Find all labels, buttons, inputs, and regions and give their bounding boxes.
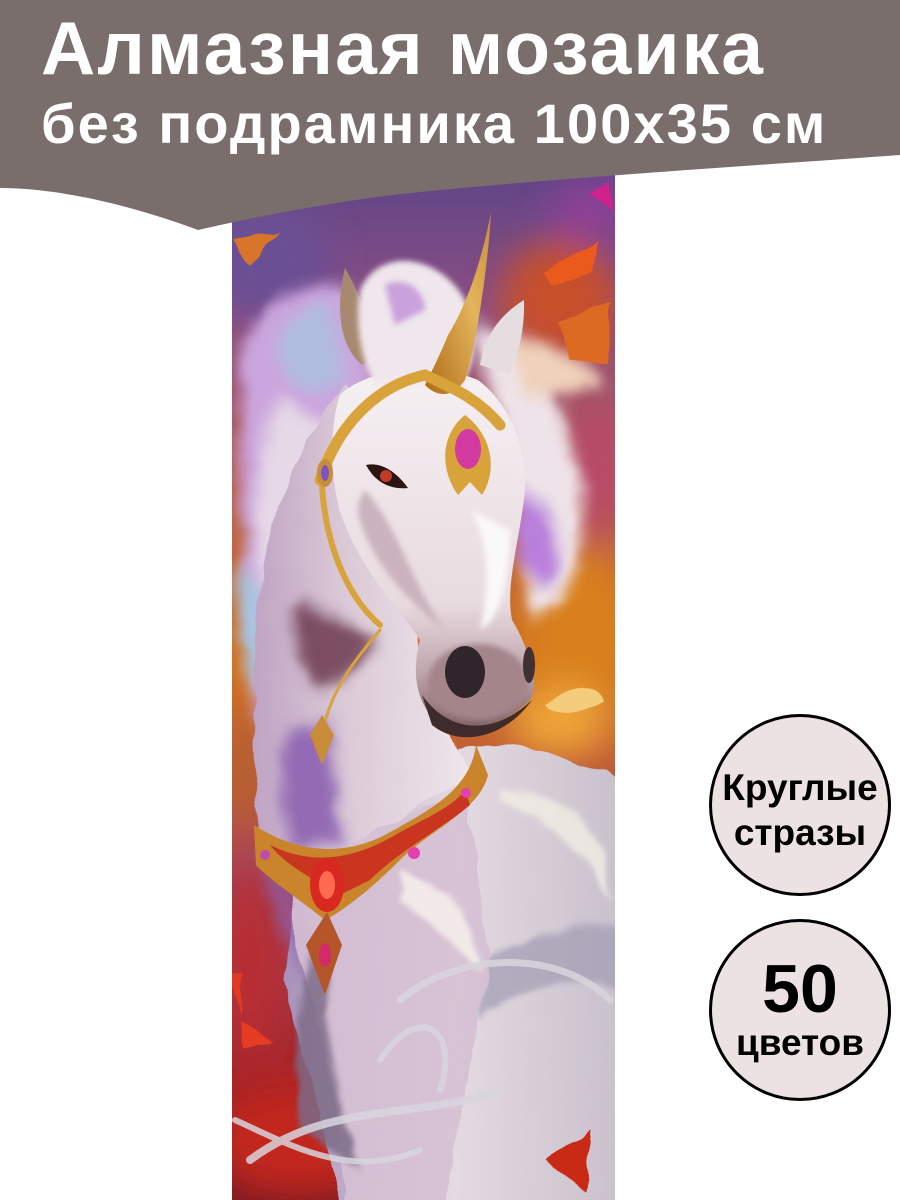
- ear left: [340, 268, 368, 365]
- tail wisps: [235, 962, 610, 1162]
- forelock: [358, 261, 474, 385]
- mane right: [470, 320, 605, 620]
- forehead jewel: [445, 415, 491, 495]
- subtitle: без подрамника 100х35 см: [41, 92, 827, 155]
- badge: round rhinestones: [709, 714, 891, 896]
- badge text line 1: Круглые: [722, 767, 878, 808]
- badge: 50 colours: [709, 919, 891, 1101]
- banner shape: [0, 0, 900, 230]
- ear right: [480, 300, 524, 375]
- muzzle: [428, 644, 528, 720]
- body: [284, 744, 615, 1200]
- lower chest: [290, 790, 490, 1200]
- colour flecks: [232, 182, 612, 1190]
- collar: [254, 745, 488, 995]
- title: Алмазная мозаика: [41, 6, 765, 90]
- badge text line 2: стразы: [734, 812, 866, 853]
- mane left: [237, 285, 380, 730]
- neck: [254, 385, 470, 890]
- horse head: [332, 369, 534, 729]
- painting: unicorn diamond mosaic: [232, 175, 615, 1200]
- background: [232, 170, 615, 1200]
- horn: [425, 212, 491, 394]
- badge number: 50: [762, 951, 838, 1027]
- eye: [366, 464, 408, 488]
- badge caption: цветов: [736, 1022, 864, 1063]
- gold bridle: [320, 375, 500, 735]
